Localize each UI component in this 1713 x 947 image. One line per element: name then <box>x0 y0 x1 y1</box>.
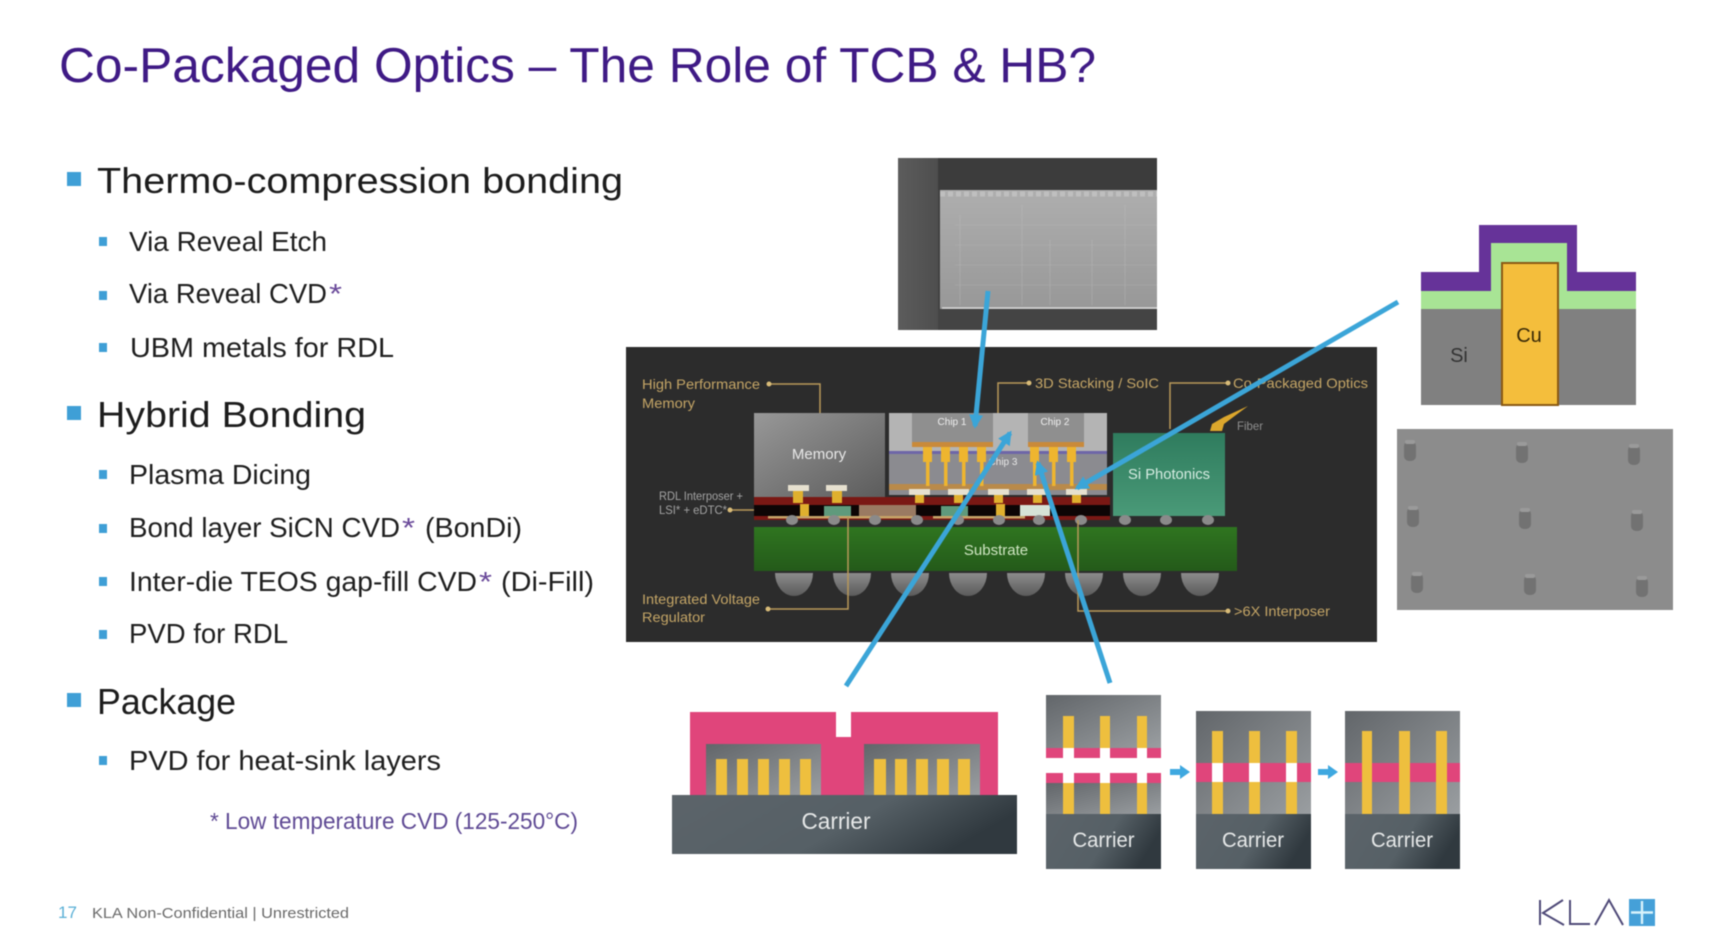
item: Bond layer: (BonDi) <box>425 512 522 543</box>
item: Inter-die gap-fill: * <box>479 566 492 597</box>
item: Inter-die gap-fill <box>99 566 594 597</box>
label: 3D stacking: 3D Stacking / SoIC <box>1035 375 1159 391</box>
block: memory <box>754 413 885 497</box>
heading: Thermo-compression bonding: Thermo-compression bonding <box>97 160 623 201</box>
item: Via Reveal CVD: * <box>329 278 342 309</box>
label: carrier: Carrier <box>802 808 871 834</box>
image: etched via SEM <box>898 158 1157 330</box>
item: Bond layer: * <box>402 512 415 543</box>
block: 3D stacked chips: Chip 2 <box>1041 417 1070 428</box>
arrow: step 2 to 3 <box>1318 765 1338 779</box>
item: Via Reveal CVD: Via Reveal CVD <box>129 278 327 309</box>
logo: KLA <box>1540 899 1655 926</box>
block: 3D stacked chips: Chip 1 <box>938 417 967 428</box>
label: RDL interposer: RDL Interposer + <box>659 489 743 503</box>
block: silicon photonics: Si Photonics <box>1128 466 1210 483</box>
block: substrate <box>754 527 1237 571</box>
image: copper pillars SEM <box>1397 429 1673 610</box>
heading: Hybrid Bonding: Hybrid Bonding <box>97 394 366 435</box>
label: carrier: Carrier <box>1072 829 1135 852</box>
diagram: hybrid bond step 3 <box>1345 711 1460 869</box>
diagram: hybrid bond step 2 <box>1196 711 1311 869</box>
label: high performance memory: High Performance <box>642 376 760 392</box>
arrow: etch SEM to chip 1 <box>975 291 988 426</box>
item: Via Reveal Etch: Via Reveal Etch <box>129 226 327 257</box>
item: UBM metals for RDL: UBM metals for RDL <box>130 332 394 363</box>
title: Co-Packaged Optics – The Role of TCB & HB? <box>59 39 1096 93</box>
item: PVD for RDL: PVD for RDL <box>129 618 288 649</box>
item: Bond layer: Bond layer SiCN CVD <box>129 512 400 543</box>
footer page number: 17 <box>58 903 77 922</box>
solder bumps <box>775 573 1219 596</box>
arrow: hybrid bond to pillars <box>1038 463 1110 683</box>
label: LSI and eDTC: LSI* + eDTC* <box>659 503 727 517</box>
diagram: die on carrier with fill <box>672 712 1017 854</box>
fiber <box>1210 406 1248 431</box>
panel: 3D package cross-section <box>626 347 1377 642</box>
label: fiber: Fiber <box>1237 419 1263 433</box>
block: memory: Memory <box>792 446 847 463</box>
block: 3D stacked chips <box>889 413 1107 495</box>
leader lines <box>728 380 1230 614</box>
item: Bond layer <box>99 512 522 543</box>
item: Plasma Dicing: Plasma Dicing <box>129 459 311 490</box>
arrow: step 1 to 2 <box>1170 765 1190 779</box>
block: 3D stacked chips: Chip 3 <box>989 457 1018 468</box>
RDL interposer band <box>754 485 1110 520</box>
footnote: * Low temperature CVD (125-250°C) <box>210 808 578 834</box>
label: co-packaged optics: Co-Packaged Optics <box>1233 375 1368 391</box>
label: integrated voltage: Integrated Voltage <box>642 591 760 607</box>
label: Cu: Cu <box>1516 325 1542 347</box>
item: PVD for heat-sink layers: PVD for heat-sink layers <box>129 745 441 776</box>
item: Inter-die gap-fill: (Di-Fill) <box>501 566 594 597</box>
label: Si: Si <box>1450 345 1468 367</box>
item: Inter-die gap-fill: Inter-die TEOS gap-fill CVD <box>129 566 477 597</box>
label: carrier: Carrier <box>1222 829 1284 852</box>
block: silicon photonics <box>1113 433 1225 516</box>
arrow: via reveal stack to chip stack <box>1077 302 1398 488</box>
diagram: hybrid bond step 1 <box>1046 695 1161 869</box>
bullet list <box>67 160 623 776</box>
arrow: carrier fill to die gap <box>846 433 1010 686</box>
microbumps <box>786 515 1214 525</box>
label: 6X interposer: >6X Interposer <box>1234 603 1330 619</box>
block: substrate: Substrate <box>964 542 1028 559</box>
diagram: Si / Cu via reveal stack <box>1421 225 1636 405</box>
label: regulator: Regulator <box>642 609 705 625</box>
footer classification: KLA Non-Confidential | Unrestricted <box>92 905 349 922</box>
heading: Package: Package <box>97 681 236 722</box>
label: memory second line: Memory <box>642 395 695 411</box>
label: carrier: Carrier <box>1371 829 1433 852</box>
